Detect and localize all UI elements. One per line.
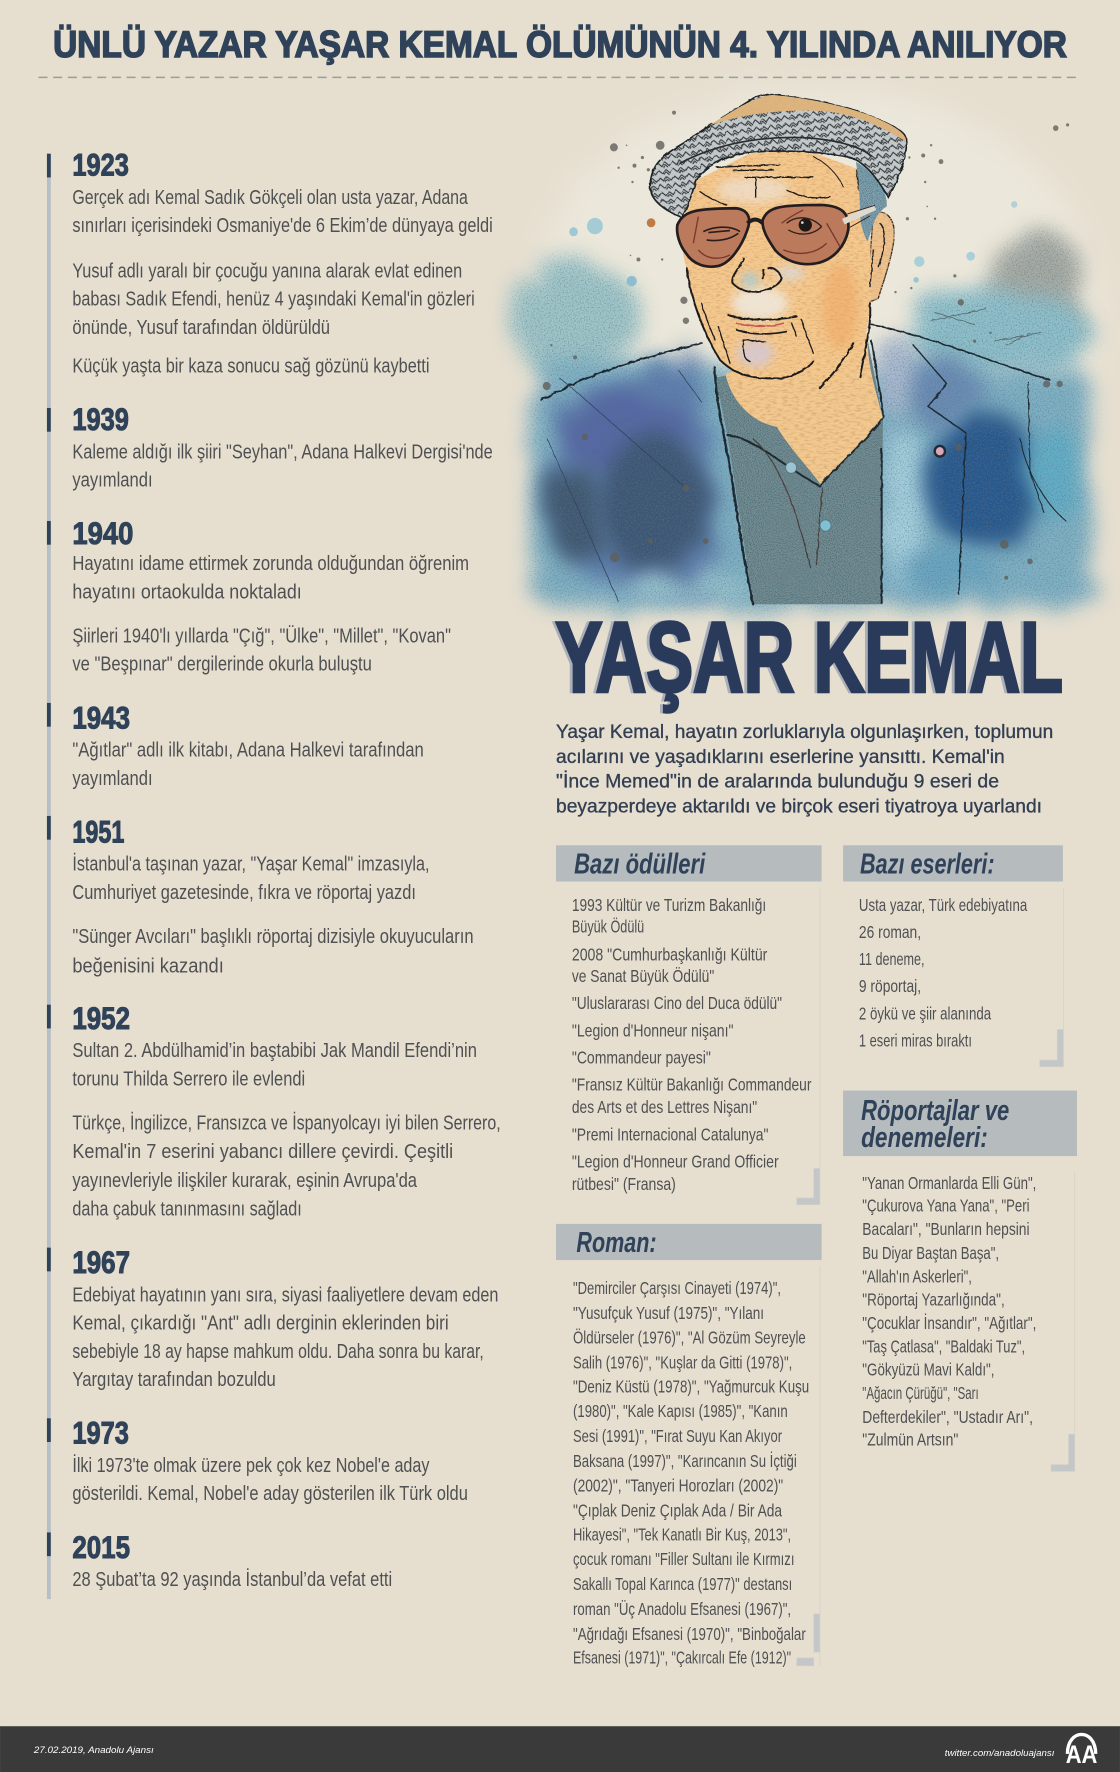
head with cap and sunglasses [650, 95, 907, 388]
interviews heading [843, 1091, 1077, 1156]
works heading: Bazı eserleri: [860, 848, 995, 880]
works corner bracket [1040, 888, 1063, 1067]
year 2015 entry: 28 Şubat’ta 92 yaşında İstanbul’da vefat etti [72, 1568, 392, 1591]
works list: 11 deneme, [859, 949, 924, 969]
novels list: Baksana (1997)", "Karıncanın Su İçtiği [573, 1451, 797, 1471]
awards list: "Premi Internacional Catalunya" [572, 1124, 769, 1144]
novels list: (2002)", "Tanyeri Horozları (2002)" [573, 1476, 783, 1496]
header divider [38, 76, 1076, 78]
works list: 26 roman, [859, 922, 921, 942]
novels list: "Demirciler Çarşısı Cinayeti (1974)", [573, 1278, 781, 1298]
awards list: "Legion d'Honneur nişanı" [572, 1020, 733, 1040]
date and source: 27.02.2019, Anadolu Ajansı [33, 1745, 154, 1756]
timeline [47, 147, 501, 1599]
novels list: "Ağrıdağı Efsanesi (1970)", "Binboğalar [573, 1624, 806, 1644]
year 1923 entry: önünde, Yusuf tarafından öldürüldü [72, 317, 330, 339]
interviews list: "Gökyüzü Mavi Kaldı", [862, 1359, 995, 1379]
face tint patches [717, 177, 858, 367]
novels list: çocuk romanı "Filler Sultanı ile Kırmızı [573, 1549, 794, 1569]
year 1939 entry: yayımlandı [72, 470, 153, 492]
novels heading [556, 1224, 822, 1260]
novels list: Sakallı Topal Karınca (1977)" destansı [573, 1574, 792, 1594]
works list: 2 öykü ve şiir alanında [859, 1003, 991, 1023]
interviews list: Bacaları", "Bunların hepsini [862, 1219, 1030, 1239]
neck [725, 333, 883, 484]
novels list: Efsanesi (1971)", "Çakırcalı Efe (1912)" [573, 1648, 791, 1668]
year 1923 entry: Gerçek adı Kemal Sadık Gökçeli olan usta yazar, Adana [72, 187, 468, 209]
face [683, 150, 871, 383]
year 1967 entry: Edebiyat hayatının yanı sıra, siyasi faaliyetlere devam eden [72, 1284, 498, 1306]
icon: Anadolu Agency logo: AA [1066, 1741, 1097, 1769]
novels list: roman "Üç Anadolu Efsanesi (1967)", [573, 1599, 791, 1619]
intro paragraph: Yaşar Kemal, hayatın zorluklarıyla olgunlaşırken, toplumun [556, 721, 1053, 743]
interviews list [862, 1173, 1036, 1449]
novels corner bracket [797, 1266, 820, 1666]
novels list: "Çıplak Deniz Çıplak Ada / Bir Ada [573, 1501, 782, 1521]
year 1967 entry: Yargıtay tarafından bozuldu [72, 1369, 276, 1391]
year 2015 entry: 2015 [72, 1529, 130, 1565]
year 1952 entry: Sultan 2. Abdülhamid’in baştabibi Jak Mandil Efendi’nin [72, 1040, 477, 1062]
year 1939 entry: Kaleme aldığı ilk şiiri "Seyhan", Adana Halkevi Dergisi'nde [72, 441, 493, 463]
flat cap [650, 95, 907, 217]
awards list: des Arts et des Lettres Nişanı" [572, 1097, 757, 1117]
hair [856, 162, 887, 242]
novels list: (1980)", "Kale Kapısı (1985)", "Kanın [573, 1401, 788, 1421]
panel: awards [556, 845, 822, 1205]
interviews list: "Yanan Ormanlarda Elli Gün", [862, 1173, 1036, 1193]
year 1952 entry: torunu Thilda Serrero ile evlendi [72, 1068, 305, 1090]
interviews heading: Röportajlar ve [861, 1094, 1009, 1126]
polo shirt [716, 341, 883, 604]
intro paragraph: acılarını ve yaşadıklarını eserlerine yansıttı. Kemal'in [556, 746, 1005, 768]
year 1940 entry [47, 515, 469, 676]
awards list: "Fransız Kültür Bakanlığı Commandeur [572, 1075, 812, 1095]
year 1973 entry: İlki 1973'te olmak üzere pek çok kez Nobel'e aday [72, 1454, 430, 1477]
year 1951 entry: "Sünger Avcıları" başlıklı röportaj dizisiyle okuyucuların [72, 926, 474, 948]
facial lines [687, 157, 884, 388]
year 1943 entry [47, 699, 424, 790]
year 1940 entry: hayatını ortaokulda noktaladı [72, 581, 302, 603]
paint splatter [543, 111, 1069, 580]
awards list: Büyük Ödülü [572, 916, 644, 936]
year 1952 entry [47, 1000, 501, 1220]
interviews list: "Röportaj Yazarlığında", [862, 1289, 1005, 1309]
awards heading: Bazı ödülleri [574, 848, 706, 880]
panel: works [843, 845, 1063, 1067]
lapel pin and buttons [786, 446, 945, 531]
interviews heading: denemeleri: [861, 1121, 988, 1153]
jacket and shirt outlines [542, 308, 1066, 604]
year 1951 entry [47, 813, 474, 977]
year 1967 entry: Kemal, çıkardığı "Ant" adlı derginin eklerinden biri [72, 1313, 449, 1335]
year 1923 entry: 1923 [72, 147, 129, 183]
novels list: Öldürseler (1976)", "Al Gözüm Seyreyle [573, 1328, 806, 1348]
year 1940 entry: 1940 [72, 515, 133, 551]
interviews list: "Taş Çatlasa", "Baldaki Tuz", [862, 1337, 1025, 1357]
year 1940 entry: Şiirleri 1940'lı yıllarda "Çığ", "Ülke", "Millet", "Kovan" [72, 625, 451, 647]
year 1923 entry: Yusuf adlı yaralı bir çocuğu yanına alarak evlat edinen [72, 260, 462, 282]
year 1973 entry [47, 1415, 468, 1505]
portrait illustration of Yaşar Kemal [512, 88, 1101, 606]
twitter handle: twitter.com/anadoluajansı [945, 1748, 1055, 1759]
year 1973 entry: gösterildi. Kemal, Nobel'e aday gösterilen ilk Türk oldu [72, 1483, 468, 1505]
sunglasses [677, 205, 875, 267]
year 1973 entry: 1973 [72, 1415, 129, 1451]
interviews list: "Zulmün Artsın" [862, 1429, 958, 1449]
works list [859, 895, 1027, 1050]
year 1943 entry: yayımlandı [72, 768, 153, 790]
interviews list: "Allah'ın Askerleri", [862, 1267, 972, 1287]
awards list: 2008 "Cumhurbaşkanlığı Kültür [572, 945, 768, 965]
paper wash [532, 88, 1101, 529]
intro paragraph: beyazperdeye aktarıldı ve birçok eseri tiyatroya uyarlandı [556, 796, 1042, 818]
jacket and watercolor wash [512, 88, 1101, 606]
awards list: "Uluslararası Cino del Duca ödülü" [572, 993, 782, 1013]
intro paragraph [556, 721, 1053, 818]
timeline axis [47, 154, 51, 1599]
year 1939 entry: 1939 [72, 401, 129, 437]
footer bar [0, 1726, 1120, 1772]
year 1940 entry: Hayatını idame ettirmek zorunda olduğundan öğrenim [72, 553, 469, 575]
novels list: "Deniz Küstü (1978)", "Yağmurcuk Kuşu [573, 1376, 809, 1396]
year 1952 entry: Türkçe, İngilizce, Fransızca ve İspanyolcayı iyi bilen Serrero, [72, 1112, 501, 1135]
year 1939 entry [47, 401, 493, 492]
panel: interviews and essays [843, 1091, 1077, 1471]
year 1951 entry: 1951 [72, 813, 124, 849]
interviews list: "Ağacın Çürüğü", "Sarı [862, 1383, 979, 1403]
intro paragraph: "İnce Memed"in de aralarında bulunduğu 9 eseri de [556, 770, 999, 793]
interviews list: "Çukurova Yana Yana", "Peri [862, 1195, 1030, 1215]
year 1923 entry: sınırları içerisindeki Osmaniye'de 6 Ekim’de dünyaya geldi [72, 215, 493, 237]
year 1923 entry: babası Sadık Efendi, henüz 4 yaşındaki Kemal'in gözleri [72, 289, 475, 311]
awards list: "Legion d'Honneur Grand Officier [572, 1151, 779, 1171]
awards list: rütbesi" (Fransa) [572, 1174, 676, 1194]
novels heading: Roman: [576, 1226, 657, 1258]
year 1967 entry [47, 1244, 498, 1391]
panel: novels [556, 1224, 822, 1668]
year 1923 entry: Küçük yaşta bir kaza sonucu sağ gözünü kaybetti [72, 355, 429, 377]
works list: 9 röportaj, [859, 976, 921, 996]
year 1952 entry: yayınevleriyle ilişkiler kurarak, eşinin Avrupa'da [72, 1170, 418, 1192]
year 1943 entry: 1943 [72, 699, 130, 735]
year 1940 entry: ve "Beşpınar" dergilerinde okurla buluştu [72, 654, 372, 676]
novels list: Sesi (1991)", "Fırat Suyu Kan Akıyor [573, 1426, 782, 1446]
year 1952 entry: 1952 [72, 1000, 130, 1036]
year 1923 entry [47, 147, 493, 377]
year 2015 entry [47, 1529, 392, 1591]
watercolor blobs [512, 231, 1089, 606]
interviews corner bracket [1051, 1171, 1075, 1471]
year 1951 entry: İstanbul'a taşınan yazar, "Yaşar Kemal" imzasıyla, [72, 853, 429, 876]
year 1967 entry: sebebiyle 18 ay hapse mahkum oldu. Daha sonra bu karar, [72, 1341, 484, 1363]
awards list [572, 895, 812, 1194]
novels list: Hikayesi", "Tek Kanatlı Bir Kuş, 2013", [573, 1524, 791, 1544]
interviews list: Bu Diyar Baştan Başa", [862, 1243, 999, 1263]
year 1952 entry: Kemal'in 7 eserini yabancı dillere çevirdi. Çeşitli [72, 1141, 453, 1163]
ear [867, 212, 894, 303]
year 1967 entry: 1967 [72, 1244, 130, 1280]
awards list: 1993 Kültür ve Turizm Bakanlığı [572, 895, 766, 915]
novels list: "Yusufçuk Yusuf (1975)", "Yılanı [573, 1303, 764, 1323]
novels list: Salih (1976)", "Kuşlar da Gitti (1978)", [573, 1353, 792, 1373]
year 1952 entry: daha çabuk tanınmasını sağladı [72, 1198, 302, 1220]
works list: 1 eseri miras bıraktı [859, 1030, 972, 1050]
interviews list: "Çocuklar İnsandır", "Ağıtlar", [862, 1313, 1036, 1333]
awards list: ve Sanat Büyük Ödülü" [572, 966, 714, 986]
works list: Usta yazar, Türk edebiyatına [859, 895, 1027, 915]
year 1951 entry: beğenisini kazandı [72, 955, 224, 977]
year 1943 entry: "Ağıtlar" adlı ilk kitabı, Adana Halkevi tarafından [72, 740, 424, 762]
novels list [573, 1278, 809, 1668]
awards corner bracket [797, 888, 820, 1205]
awards heading [556, 845, 822, 881]
year 1951 entry: Cumhuriyet gazetesinde, fıkra ve röportaj yazdı [72, 882, 416, 904]
awards list: "Commandeur payesi" [572, 1047, 711, 1067]
interviews list: Defterdekiler", "Ustadır Arı", [862, 1407, 1033, 1427]
